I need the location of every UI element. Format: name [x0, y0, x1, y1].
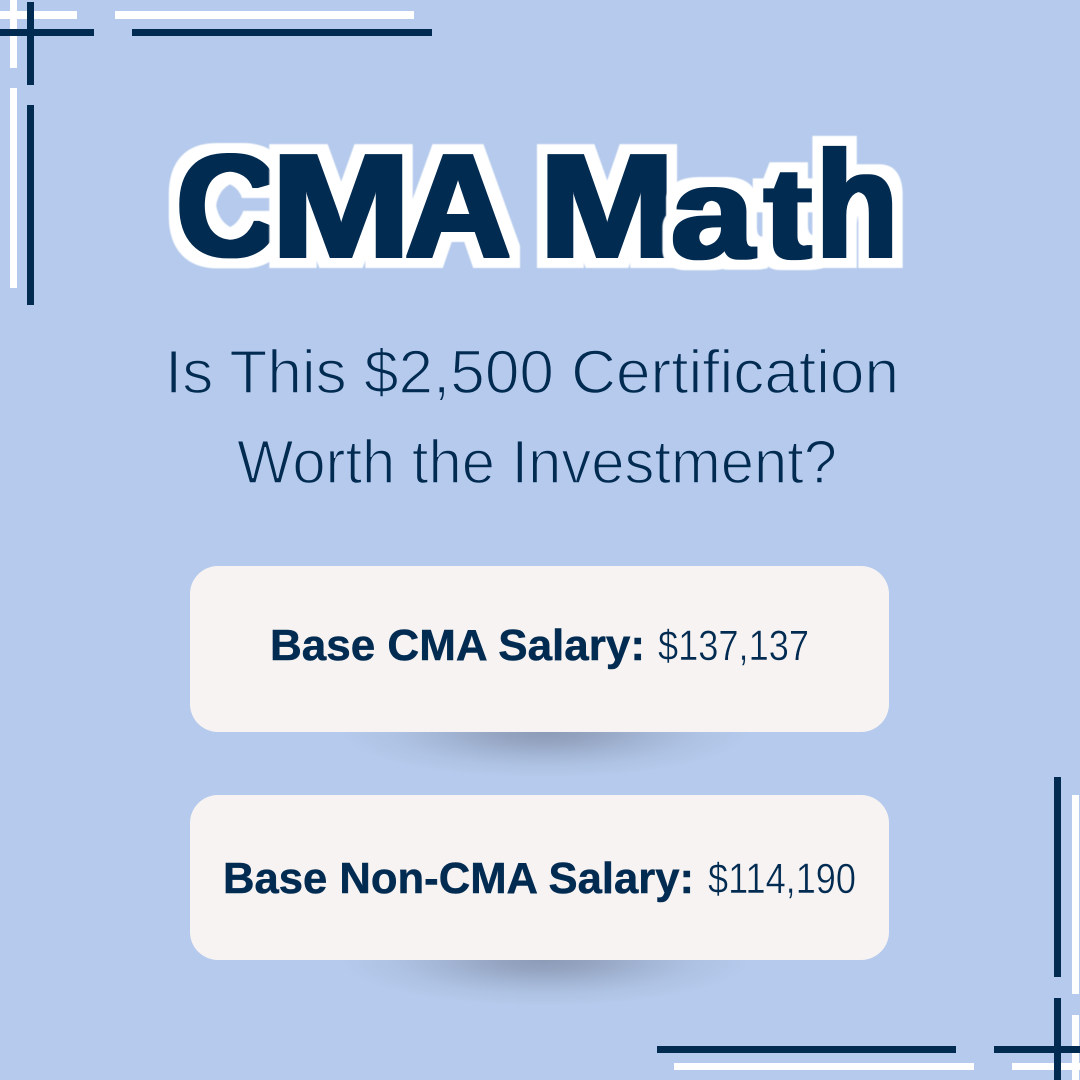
- subtitle: [165, 338, 899, 496]
- title: CMA Math: A: [405, 124, 511, 289]
- card: base non-CMA salary: $114,190: [708, 855, 856, 903]
- shadow: under first card: [340, 686, 750, 778]
- shadow: under second card: [340, 914, 750, 1006]
- title: CMA Math: [176, 120, 898, 290]
- title: CMA Math: M: [271, 124, 411, 289]
- title: CMA Math: t: [764, 140, 812, 286]
- subtitle: Is This $2,500 Certification: [165, 338, 899, 406]
- title: CMA Math: a: [671, 140, 756, 286]
- card: base CMA salary: Base CMA Salary:: [270, 621, 645, 670]
- card: base CMA salary: [190, 566, 889, 732]
- card: base CMA salary: $137,137: [658, 622, 809, 670]
- decorative frame: top-left corner: [0, 0, 432, 305]
- card: base non-CMA salary: [190, 795, 889, 960]
- decorative frame: bottom-right corner: [657, 777, 1080, 1080]
- title: CMA Math: M: [539, 124, 675, 289]
- card: base non-CMA salary: Base Non-CMA Salary:: [223, 854, 694, 903]
- title: CMA Math: h: [816, 120, 898, 290]
- subtitle: Worth the Investment?: [237, 428, 837, 496]
- title: CMA Math: C: [176, 124, 278, 287]
